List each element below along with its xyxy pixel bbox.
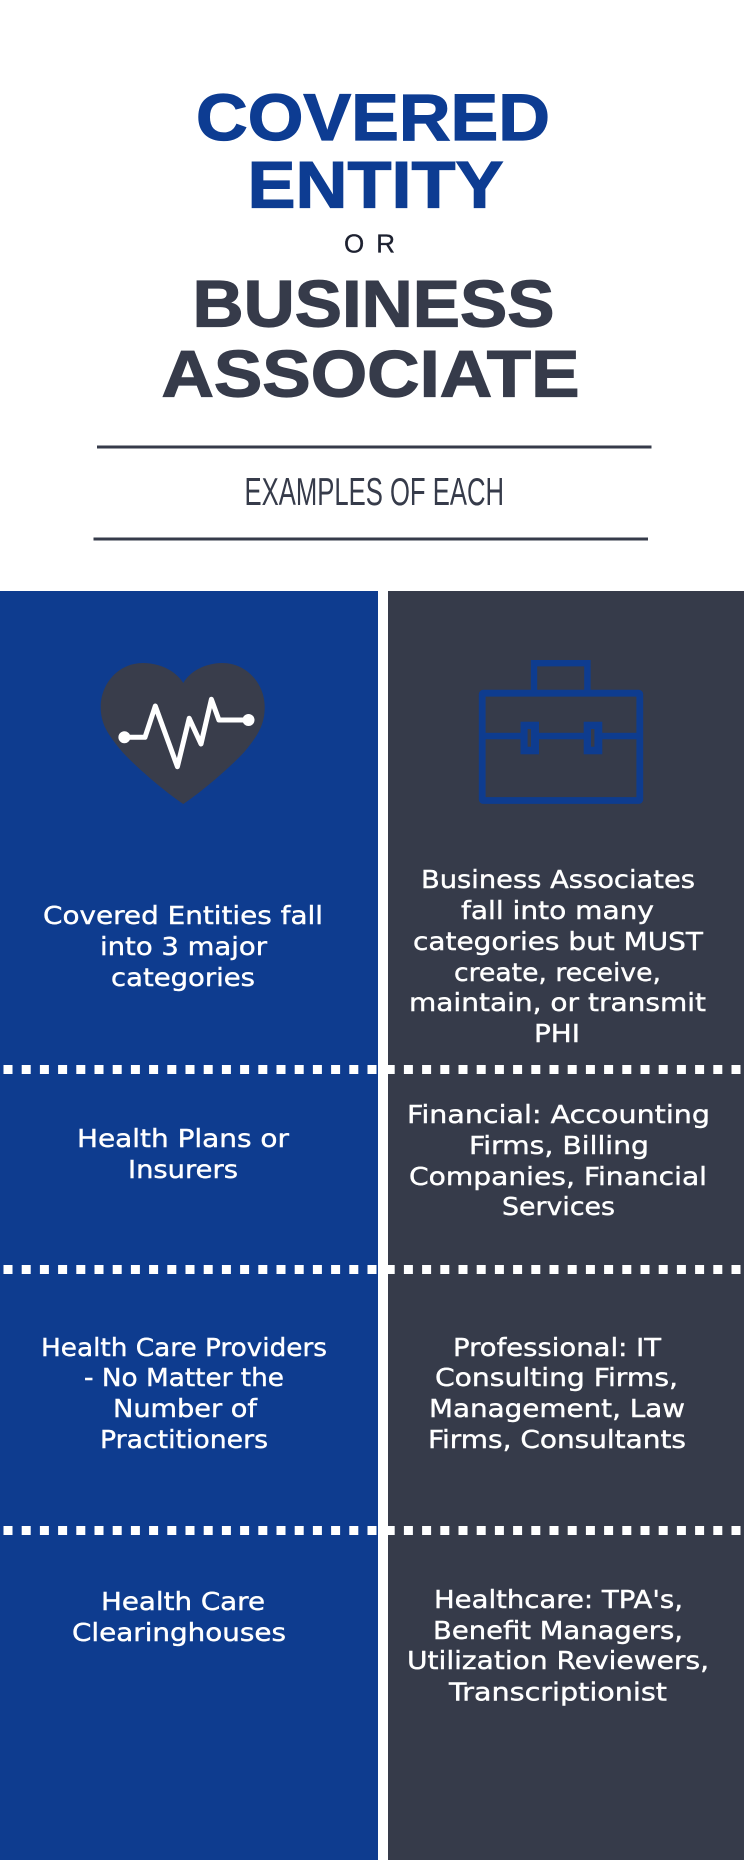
- text: intro covered entities: [43, 901, 323, 992]
- text: professional: [428, 1333, 686, 1454]
- text: intro business associates: create, receive,: [454, 958, 661, 987]
- text: intro business associates: Business Associates: [421, 865, 695, 894]
- text: clearinghouses: Health Care: [101, 1587, 265, 1616]
- text: intro business associates: PHI: [534, 1019, 580, 1048]
- text: intro business associates: categories but MUST: [413, 927, 704, 956]
- text: intro covered entities: Covered Entities fall: [43, 901, 323, 930]
- text: health care providers: - No Matter the: [84, 1363, 284, 1392]
- text: financial: Firms, Billing: [469, 1131, 649, 1160]
- text: financial: [407, 1100, 710, 1221]
- text: professional: Professional: IT: [453, 1333, 662, 1362]
- text: intro business associates: fall into many: [461, 896, 654, 925]
- text: intro covered entities: into 3 major: [100, 932, 268, 961]
- text: professional: Management, Law: [429, 1394, 685, 1423]
- text: healthcare: [407, 1585, 709, 1706]
- heading: covered entity: ENTITY: [248, 148, 504, 222]
- heading: business associate: ASSOCIATE: [162, 336, 580, 410]
- icon: briefcase: [482, 663, 640, 800]
- heading: or: OR: [344, 228, 395, 258]
- text: healthcare: Utilization Reviewers,: [407, 1646, 709, 1675]
- subtitle: EXAMPLES OF EACH: [244, 471, 504, 514]
- text: intro business associates: maintain, or transmit: [409, 988, 706, 1017]
- text: professional: Firms, Consultants: [428, 1425, 686, 1454]
- text: financial: Companies, Financial: [409, 1162, 707, 1191]
- text: health care providers: Health Care Providers: [41, 1333, 327, 1362]
- panel: business associates: [388, 591, 744, 1860]
- text: professional: Consulting Firms,: [435, 1363, 678, 1392]
- heading: business associate: [162, 266, 580, 410]
- text: healthcare: Healthcare: TPA's,: [434, 1585, 683, 1614]
- text: intro business associates: [409, 865, 706, 1048]
- icon: heart with pulse: [101, 663, 265, 804]
- heading: covered entity: COVERED: [196, 80, 550, 154]
- text: financial: Financial: Accounting: [407, 1100, 710, 1129]
- text: healthcare: Benefit Managers,: [433, 1616, 683, 1645]
- text: health plans: Insurers: [128, 1155, 238, 1184]
- text: healthcare: Transcriptionist: [448, 1678, 667, 1706]
- text: health plans: [77, 1124, 290, 1184]
- title: [162, 80, 580, 410]
- heading: business associate: BUSINESS: [192, 266, 554, 340]
- text: health plans: Health Plans or: [77, 1124, 290, 1153]
- text: clearinghouses: [72, 1587, 286, 1647]
- text: health care providers: [41, 1333, 327, 1454]
- text: health care providers: Number of: [113, 1394, 259, 1423]
- subtitle band: [94, 446, 652, 540]
- text: health care providers: Practitioners: [100, 1425, 268, 1454]
- text: financial: Services: [502, 1192, 615, 1221]
- panel: covered entities: [0, 591, 378, 1860]
- text: clearinghouses: Clearinghouses: [72, 1618, 286, 1647]
- text: intro covered entities: categories: [111, 963, 255, 992]
- heading: covered entity: [196, 80, 550, 222]
